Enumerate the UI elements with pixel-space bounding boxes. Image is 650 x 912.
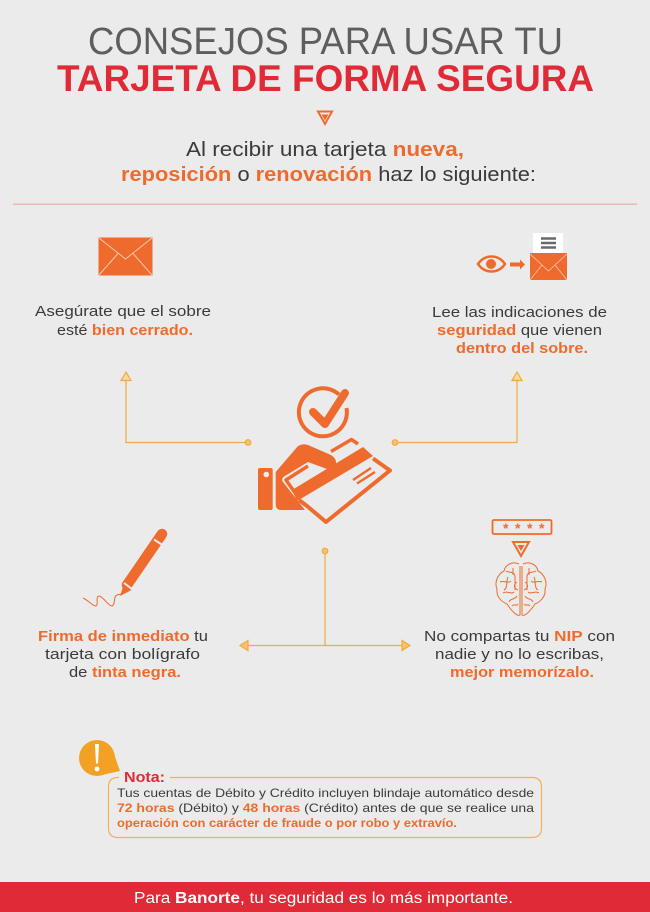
- icon: pen with signature: [83, 534, 162, 606]
- text: PIN tip: nadie y no lo escribas,: [435, 646, 604, 663]
- subtitle: Al recibir una tarjeta nueva,: [186, 138, 464, 161]
- note box: [108, 778, 542, 838]
- icon: PIN field, marker and brain: *: [527, 520, 533, 536]
- icon: eye, arrow and open envelope: [478, 233, 567, 280]
- note heading: Nota:: [124, 769, 165, 786]
- icon: check badge: [299, 388, 347, 436]
- text: sign card tip: [38, 628, 208, 681]
- note text: operación con carácter de fraude o por robo y extravío.: [117, 816, 457, 830]
- text: sealed envelope tip: Asegúrate que el sobre: [35, 303, 211, 320]
- footer banner: [0, 882, 650, 912]
- icon: closed envelope: [98, 238, 152, 276]
- text: PIN tip: No compartas tu NIP con: [424, 628, 615, 645]
- icon: card signature lines: [353, 468, 375, 484]
- title: CONSEJOS PARA USAR TU: [88, 21, 563, 63]
- text: PIN tip: [424, 628, 615, 681]
- icon: exclamation bubble: [79, 740, 120, 776]
- footer banner: Para Banorte , tu seguridad es lo más importante.: [134, 890, 513, 907]
- title: [57, 21, 594, 99]
- text: read instructions tip: [432, 304, 607, 357]
- text: sign card tip: tarjeta con bolígrafo: [45, 646, 200, 663]
- icon: hand holding card with check: [258, 388, 390, 522]
- text: sign card tip: de tinta negra.: [69, 664, 181, 681]
- icon: credit card: [286, 440, 390, 522]
- icon: PIN field, marker and brain: *: [539, 520, 545, 536]
- text: read instructions tip: seguridad que vienen: [437, 322, 602, 339]
- callout: note: [79, 740, 542, 838]
- text: sealed envelope tip: [35, 303, 211, 339]
- text: PIN tip: mejor memorízalo.: [450, 664, 594, 681]
- note text: 72 horas (Débito) y 48 horas (Crédito) antes de que se realice una: [117, 801, 534, 815]
- text: read instructions tip: Lee las indicaciones de: [432, 304, 607, 321]
- connector: center to top left: [121, 372, 251, 445]
- note text: Tus cuentas de Débito y Crédito incluyen blindaje automático desde: [117, 786, 534, 800]
- icon: PIN field, marker and brain: [492, 520, 552, 615]
- text: sign card tip: Firma de inmediato tu: [38, 628, 208, 645]
- icon: PIN field, marker and brain: *: [515, 520, 521, 536]
- icon: triangle marker: [318, 112, 332, 124]
- note text: [117, 786, 534, 830]
- icon: card stripe: [292, 447, 373, 501]
- subtitle: reposición o renovación haz lo siguiente:: [121, 163, 536, 186]
- icon: PIN field, marker and brain: *: [503, 520, 509, 536]
- text: sealed envelope tip: esté bien cerrado.: [57, 322, 193, 339]
- title: TARJETA DE FORMA SEGURA: [57, 58, 594, 99]
- connector: center to bottom tips: [240, 548, 410, 650]
- connector: center to top right: [392, 372, 522, 445]
- icon: hand: [258, 444, 336, 510]
- subtitle: [121, 138, 536, 186]
- text: read instructions tip: dentro del sobre.: [456, 340, 588, 357]
